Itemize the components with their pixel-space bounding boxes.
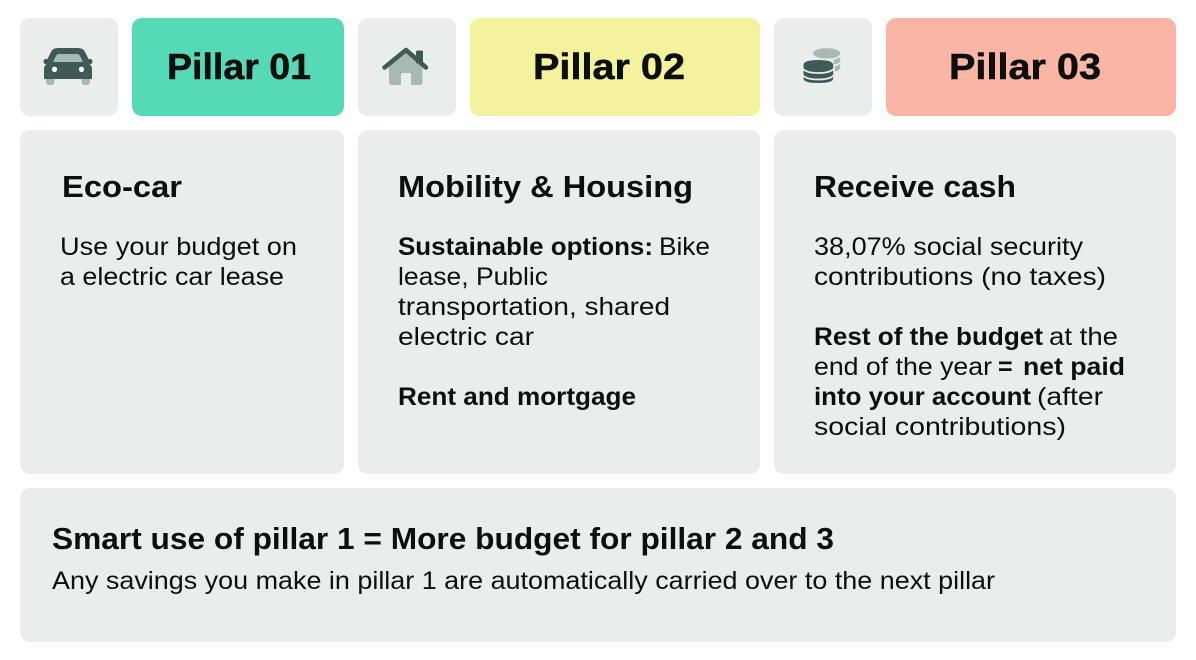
text block: sustainable options: transportation, shared xyxy=(398,293,670,321)
icon tile: coins xyxy=(774,18,872,116)
text block: rest of the budget: into your account xyxy=(814,383,1032,411)
text block: sustainable options: electric car xyxy=(398,323,534,351)
panel: Eco-car xyxy=(20,130,344,474)
text block: rest of the budget: net paid xyxy=(1023,353,1125,381)
heading tile: Pillar 02: Pillar 02 xyxy=(533,46,685,87)
panel: Receive cash xyxy=(774,130,1176,474)
text block: Eco-car description xyxy=(60,233,297,291)
heading tile: Pillar 01 xyxy=(132,18,344,116)
text block: rest of the budget: at the xyxy=(1049,323,1118,351)
text block: social security: contributions (no taxes) xyxy=(814,263,1106,291)
heading tile: Pillar 03 xyxy=(886,18,1176,116)
icon: car xyxy=(44,48,92,85)
text block: rest of the budget xyxy=(814,323,1125,441)
summary heading: Smart use of pillar 1 = More budget for pillar 2 and 3 xyxy=(52,521,834,556)
text block: Eco-car description: Use your budget on xyxy=(60,233,297,261)
heading tile: Pillar 03: Pillar 03 xyxy=(949,46,1101,87)
text block: Eco-car description: a electric car lease xyxy=(60,263,284,291)
panel heading: Mobility and Housing: Mobility & Housing xyxy=(398,169,693,204)
panel: summary xyxy=(20,488,1176,642)
text block: rent and mortgage: Rent and mortgage xyxy=(398,383,636,411)
text block: rest of the budget: Rest of the budget xyxy=(814,323,1044,351)
icon: coins xyxy=(803,48,840,83)
text block: sustainable options: lease, Public xyxy=(398,263,548,291)
text block: sustainable options: Bike xyxy=(659,233,710,261)
panel heading: Receive cash: Receive cash xyxy=(814,169,1016,204)
icon tile: house xyxy=(358,18,456,116)
summary text: Any savings you make in pillar 1 are automatically carried over to the next pillar xyxy=(52,567,995,595)
text block: sustainable options xyxy=(398,233,710,351)
panel: Mobility and Housing xyxy=(358,130,760,474)
text block: rest of the budget: = xyxy=(998,353,1013,381)
text block: rest of the budget: end of the year xyxy=(814,353,992,381)
text block: rest of the budget: (after xyxy=(1037,383,1103,411)
text block: social security: 38,07% social security xyxy=(814,233,1084,261)
icon: house xyxy=(384,50,426,85)
panel heading: Eco-car: Eco-car xyxy=(62,169,182,204)
icon tile: car xyxy=(20,18,118,116)
text block: social security xyxy=(814,233,1106,291)
text block: sustainable options: Sustainable options: xyxy=(398,233,653,261)
heading tile: Pillar 02 xyxy=(470,18,760,116)
text block: rest of the budget: social contributions) xyxy=(814,413,1066,441)
heading tile: Pillar 01: Pillar 01 xyxy=(167,46,311,87)
